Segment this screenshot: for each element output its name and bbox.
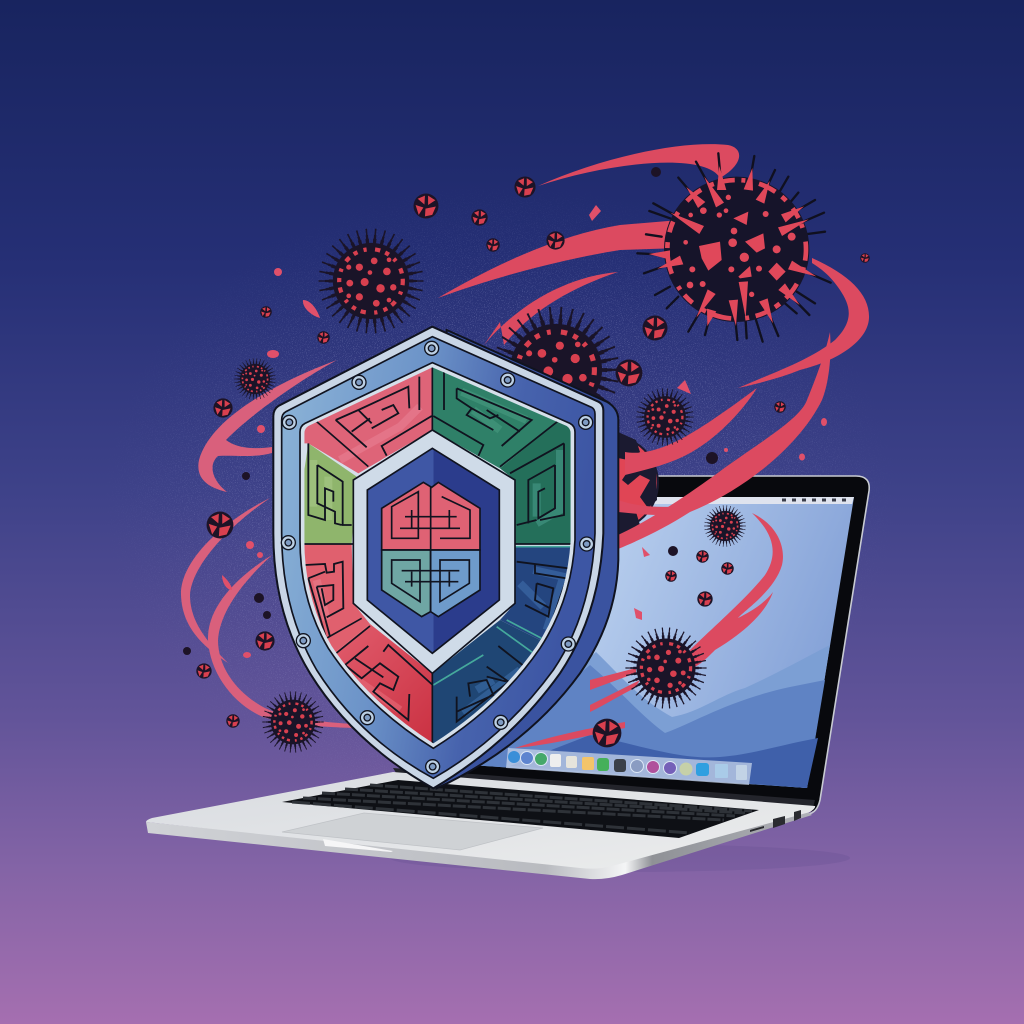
segment: right blue (500, 546, 570, 640)
swirl: top arc (538, 144, 739, 186)
centre silver hexagon (353, 430, 515, 673)
shield (273, 327, 618, 788)
swirl: upper left (198, 360, 337, 492)
chunky particles (196, 176, 870, 747)
maze lines lower (305, 562, 568, 722)
segment dividers (303, 363, 580, 750)
laptop lid bezel (440, 476, 869, 812)
tiny dots and shards (183, 167, 827, 658)
menu bar icons (782, 498, 847, 502)
swirl: left loop (181, 498, 270, 663)
spike tips (637, 153, 831, 342)
shield silver rim (273, 327, 603, 788)
thumb notch (323, 839, 393, 852)
laptop shadow (390, 844, 850, 872)
segment: bottom blue (432, 620, 540, 744)
trackpad (282, 813, 543, 850)
segment: right green (500, 422, 571, 544)
centre emblem (382, 482, 480, 617)
virus on screen top (706, 507, 744, 545)
maze corridors (313, 392, 563, 713)
laptop base deck (146, 772, 815, 869)
segment: lower left red (304, 544, 370, 652)
shield blue band (282, 337, 595, 778)
shield inner silver rim (300, 363, 575, 748)
screen wallpaper (470, 497, 854, 788)
swirl: screen arc (690, 513, 783, 668)
red swirl ribbons (181, 144, 869, 748)
swirl: left inner (208, 555, 353, 728)
segment: left green (304, 444, 357, 544)
shield back plate (437, 330, 618, 788)
laptop lid silver edge (640, 476, 869, 814)
swirl: screen lower strokes (590, 668, 640, 712)
keyboard (282, 780, 759, 838)
wallpaper waves (470, 645, 830, 788)
virus far left (236, 360, 274, 398)
virus lower left (264, 693, 322, 751)
teal edge lines (433, 547, 580, 685)
swirl: mid band (484, 272, 618, 345)
speckled particle haze (140, 207, 858, 768)
red black ball behind shield (564, 432, 658, 545)
red spike bases (649, 166, 816, 326)
hinge grille (393, 768, 815, 808)
red shards (699, 212, 786, 281)
red spots (683, 195, 796, 297)
swirl: right long tail (618, 332, 831, 549)
virus upper left (322, 232, 420, 330)
body (664, 177, 809, 322)
shield quadrants (304, 367, 571, 744)
side ports (750, 810, 801, 832)
rivets (281, 341, 594, 774)
swirl: long upper band (438, 220, 680, 298)
virus centre right (638, 390, 692, 444)
swirl: right loop (738, 258, 869, 388)
maze lines upper (308, 372, 564, 525)
laptop (146, 476, 869, 879)
menu bar (642, 497, 854, 504)
virus on screen bottom (628, 630, 704, 706)
dock (506, 748, 752, 785)
segment: bottom left red (336, 624, 432, 743)
swirl: inner tail (625, 388, 757, 475)
virus behind shield upper right (497, 311, 615, 429)
segment: top left red (304, 368, 432, 474)
swirl: branch by lid (618, 500, 690, 515)
swirl: dock sweep (515, 722, 625, 748)
centre blue hexagon (367, 448, 499, 653)
small spiky viruses (236, 232, 744, 751)
segment: top right green (432, 368, 558, 468)
large virus top right (637, 153, 831, 342)
laptop base side edge (146, 812, 812, 879)
red rim patches (667, 180, 806, 319)
